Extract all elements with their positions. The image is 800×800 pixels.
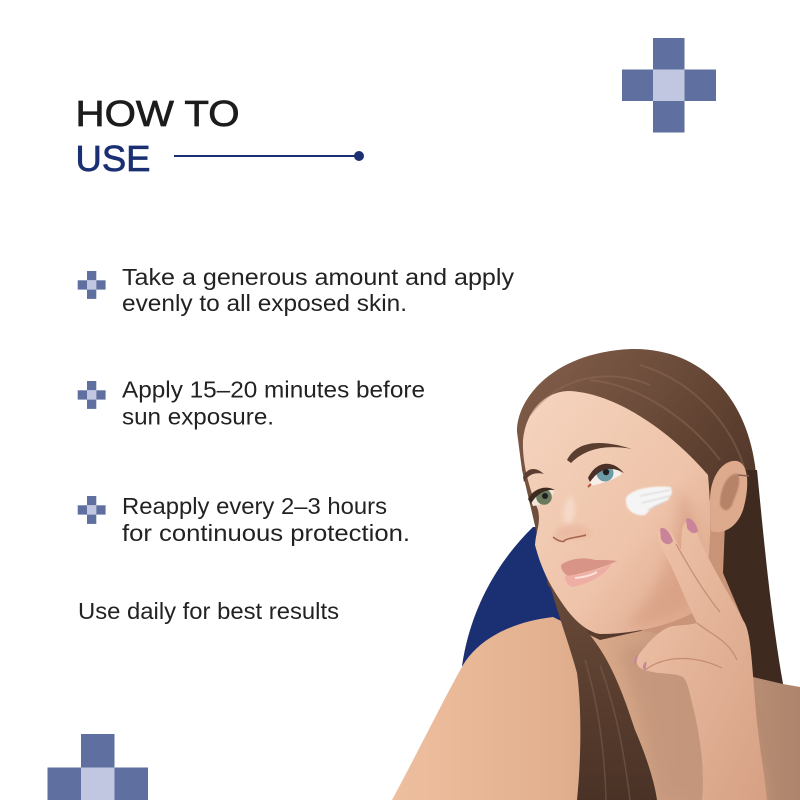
lips [561, 558, 617, 587]
step 1 text: evenly to all exposed skin. [122, 290, 407, 316]
step 2 text [122, 376, 425, 430]
blue circle backdrop [462, 527, 565, 666]
icon: large cross top right [622, 38, 716, 132]
hair top streaks [530, 365, 745, 470]
hand [634, 518, 767, 800]
cheek shading [625, 490, 698, 628]
icon: bullet cross 2 [78, 381, 106, 409]
eye left [528, 488, 555, 506]
closing note: Use daily for best results [78, 598, 339, 624]
title [76, 93, 240, 179]
title: USE [76, 138, 150, 179]
step 2 text: Apply 15–20 minutes before [122, 376, 425, 402]
icon: bullet cross 3 [78, 496, 106, 524]
step 1 text: Take a generous amount and apply [122, 264, 515, 290]
step 1 text [122, 264, 515, 316]
icon: large cross bottom left [48, 734, 148, 800]
ear [710, 461, 747, 532]
eye right [588, 464, 624, 487]
sunscreen swipe [626, 487, 672, 515]
step 2 text: sun exposure. [122, 404, 274, 430]
step 3 text: Reapply every 2–3 hours [122, 493, 387, 519]
neck under ear [640, 500, 745, 640]
hair strand highlights [585, 660, 630, 800]
nose [553, 495, 592, 542]
title: HOW TO [76, 93, 240, 134]
face [523, 391, 710, 634]
inner ear [720, 474, 739, 510]
illustration: woman applying sunscreen [392, 349, 800, 800]
right lower hair panel [722, 470, 783, 684]
step 3 text [122, 493, 410, 546]
fingernails [660, 528, 673, 544]
eyebrow left [523, 469, 544, 482]
eyebrow right [567, 443, 632, 463]
step 2 [78, 376, 425, 430]
icon: bullet cross 1 [78, 271, 106, 299]
step 3 text: for continuous protection. [122, 520, 410, 546]
neck shading [624, 648, 657, 734]
step 1 [78, 264, 515, 316]
step 3 [78, 493, 410, 546]
finger creases [645, 544, 737, 670]
front hair strand [546, 570, 657, 800]
body and shoulders [392, 617, 800, 800]
earring [738, 475, 749, 476]
hair back [517, 349, 783, 684]
title connector line with dot [174, 151, 364, 161]
